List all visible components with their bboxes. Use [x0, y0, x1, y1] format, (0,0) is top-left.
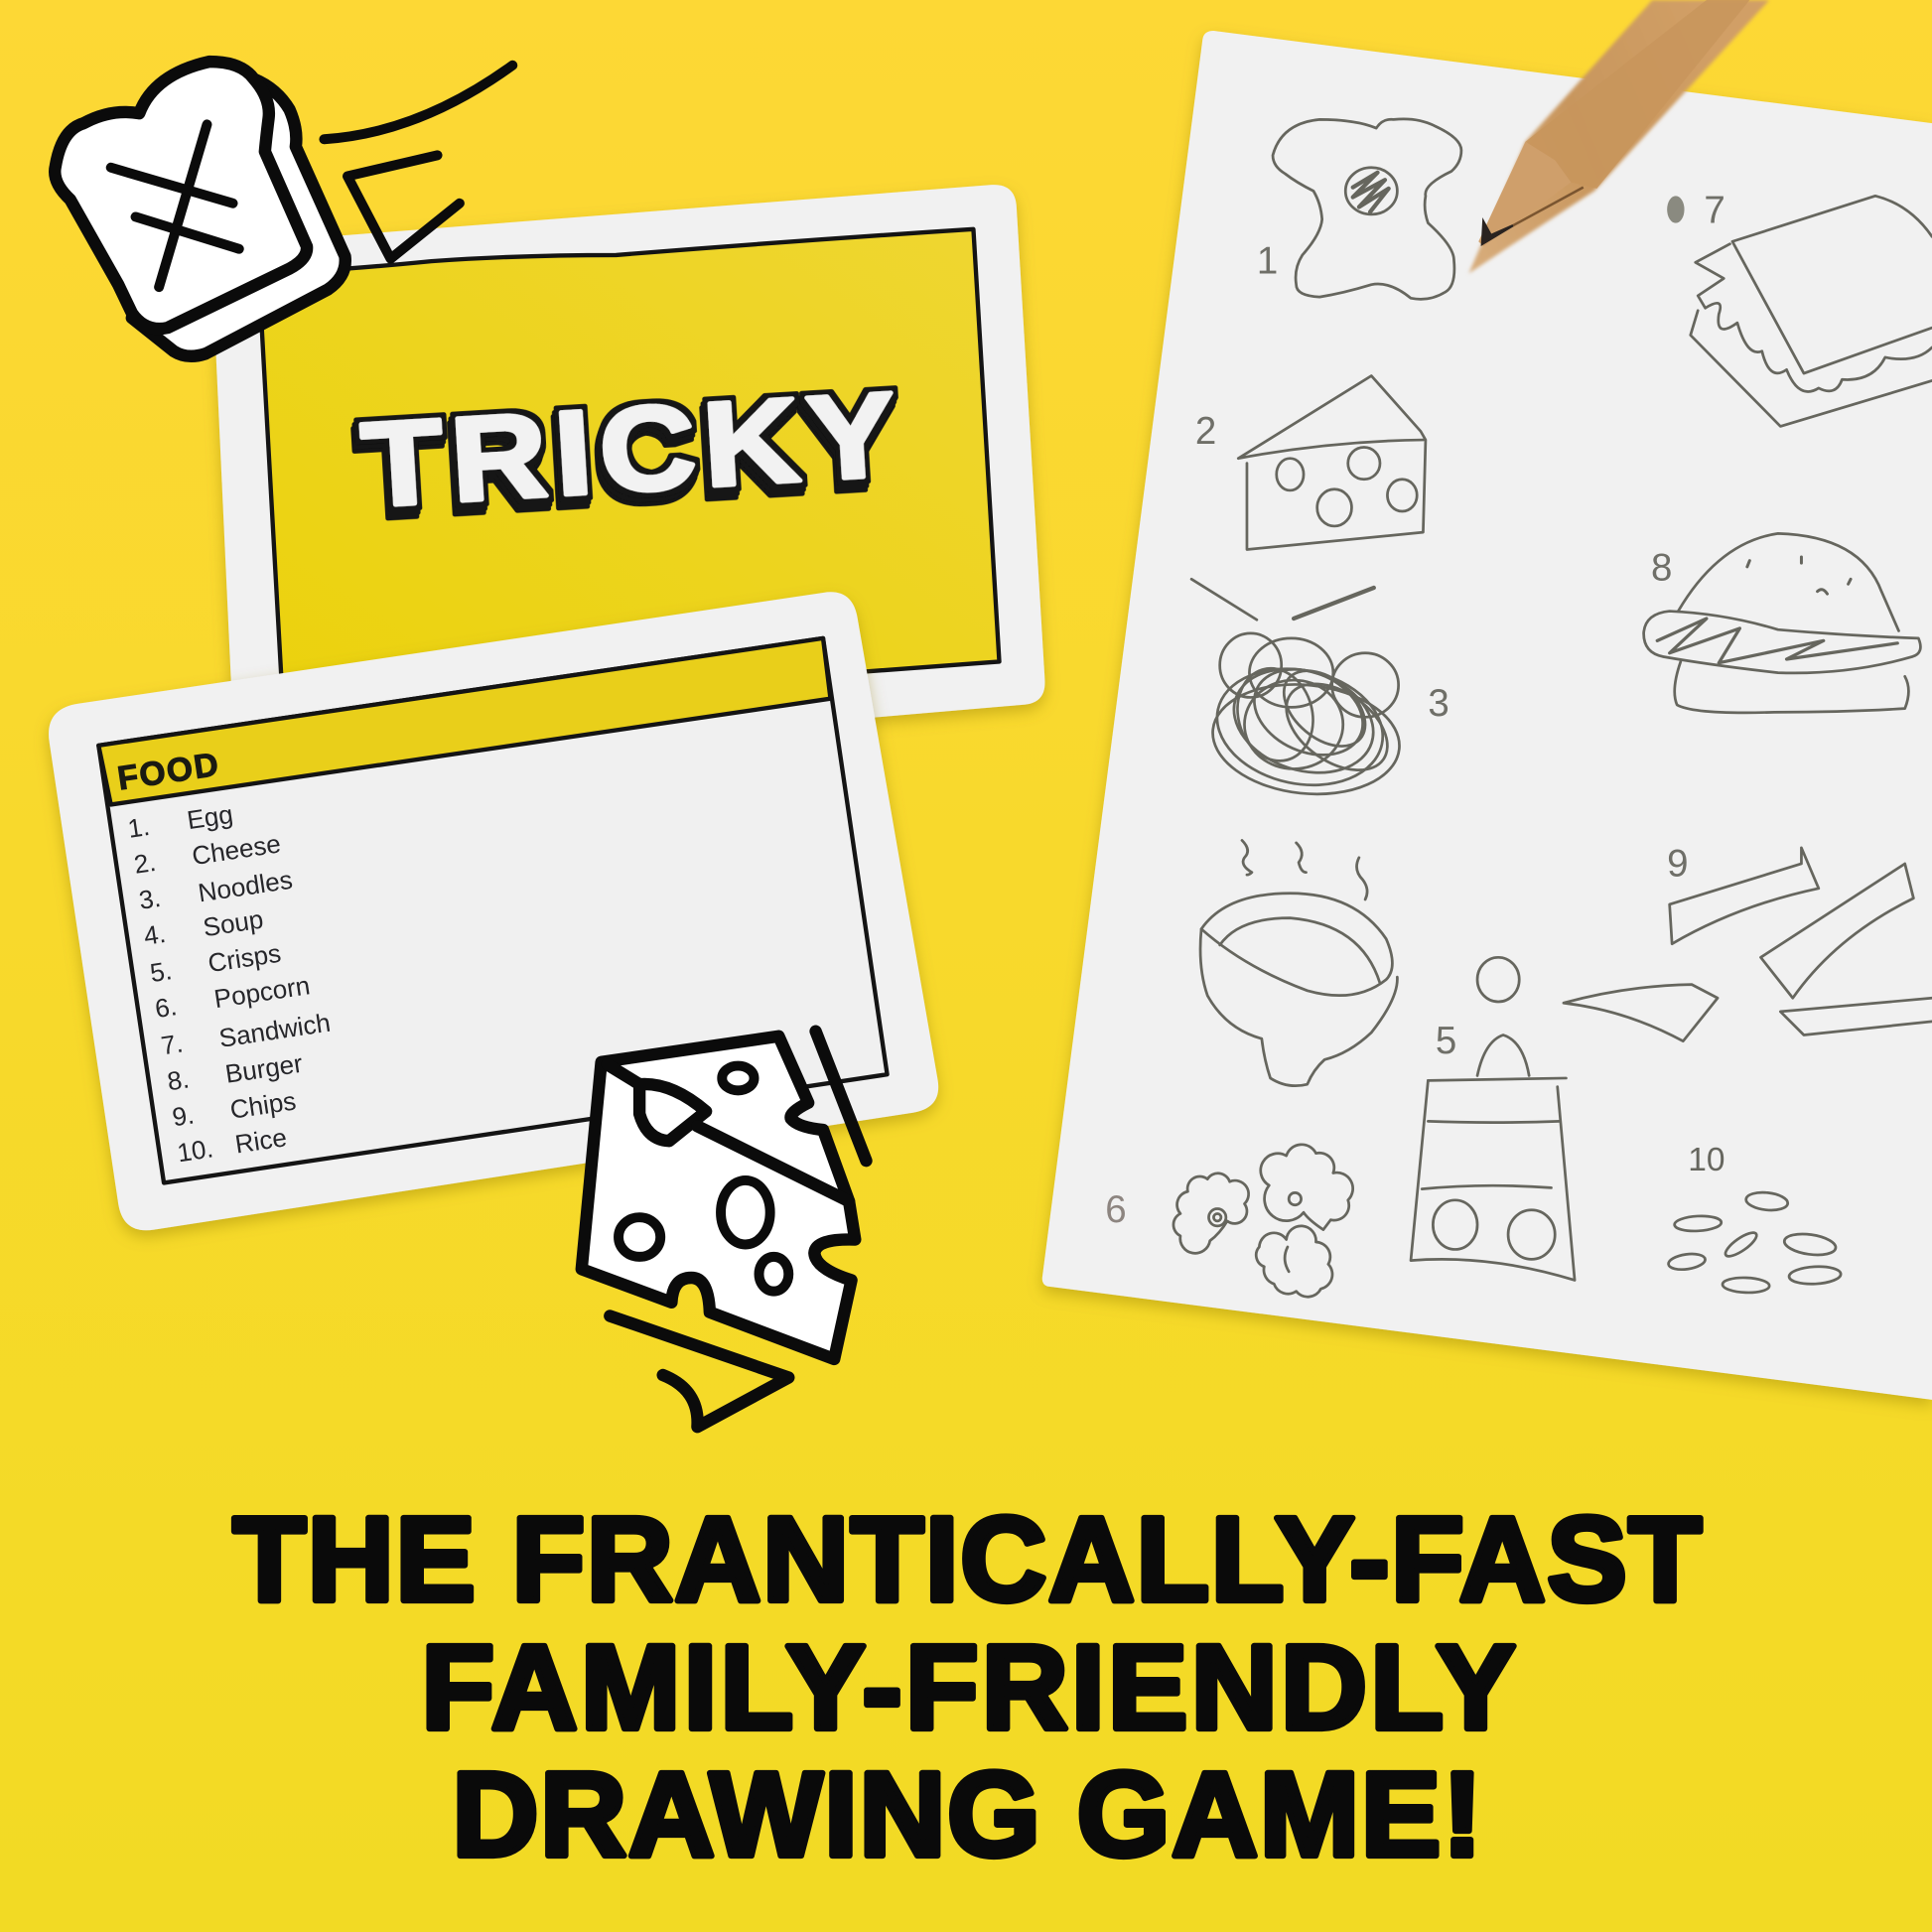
icon: toast with speed lines [55, 62, 512, 356]
food list: Cheese [190, 828, 283, 871]
drawing 4: soup bowl [1200, 840, 1397, 1086]
food list: Soup [202, 904, 265, 942]
food list: 7. [159, 1028, 185, 1060]
drawing 7: sandwich: 7 [1704, 190, 1725, 232]
food list: Sandwich [217, 1008, 333, 1053]
icon: pencil [1468, 0, 1769, 274]
drawing 8: burger [1644, 533, 1920, 713]
drawing 5: crisps [1411, 957, 1575, 1280]
food list: Rice [233, 1122, 289, 1160]
drawing 6: popcorn [1105, 1145, 1353, 1297]
drawing 10: rice: 10 [1688, 1142, 1725, 1178]
food list: Popcorn [212, 970, 312, 1014]
food list: 9. [170, 1099, 196, 1132]
card yellow panel [259, 229, 1000, 715]
food list: 3. [137, 883, 163, 915]
drawing 8: burger: 8 [1651, 547, 1672, 590]
card heading: FOOD: FOOD [115, 747, 220, 797]
food list: Egg [185, 799, 235, 835]
food list: 8. [166, 1063, 191, 1096]
icon: cheese with speed lines [582, 1032, 866, 1427]
drawing 9: chips [1564, 842, 1932, 1041]
panel: tricky card [211, 185, 1044, 770]
food list: 10. [175, 1133, 215, 1168]
drawing 7: sandwich [1667, 190, 1932, 426]
drawing 6: popcorn: 6 [1105, 1188, 1127, 1231]
food list: 4. [142, 918, 168, 951]
drawing 3: noodles: 3 [1428, 682, 1449, 725]
drawing 9: chips: 9 [1667, 842, 1689, 885]
card header band [98, 638, 830, 804]
title: headline: DRAWING GAME! [452, 1747, 1482, 1881]
drawing 1: egg: 1 [1257, 240, 1278, 283]
panel: food card [49, 592, 938, 1230]
food list [126, 799, 333, 1168]
title: headline: FAMILY-FRIENDLY [421, 1620, 1516, 1754]
drawing 3: noodles [1191, 579, 1449, 803]
card word: TRICKY: TRICKY [358, 366, 907, 532]
drawing 2: cheese: 2 [1195, 410, 1216, 453]
title: headline: THE FRANTICALLY-FAST [233, 1492, 1702, 1626]
title: headline [233, 1492, 1702, 1881]
food list: Chips [228, 1085, 298, 1125]
panel: sketch paper [1042, 31, 1932, 1400]
drawing 5: crisps: 5 [1436, 1020, 1456, 1062]
food list: Noodles [197, 865, 294, 907]
card frame [98, 638, 888, 1182]
food list: Crisps [206, 938, 283, 978]
drawing 1: egg [1257, 119, 1461, 299]
food list: 1. [126, 811, 152, 844]
food list: 5. [148, 955, 174, 988]
food list: 6. [153, 991, 179, 1024]
drawing 10: rice [1668, 1142, 1842, 1294]
food list: 2. [132, 847, 158, 880]
food list: Burger [223, 1048, 305, 1089]
drawing 2: cheese [1195, 376, 1426, 550]
